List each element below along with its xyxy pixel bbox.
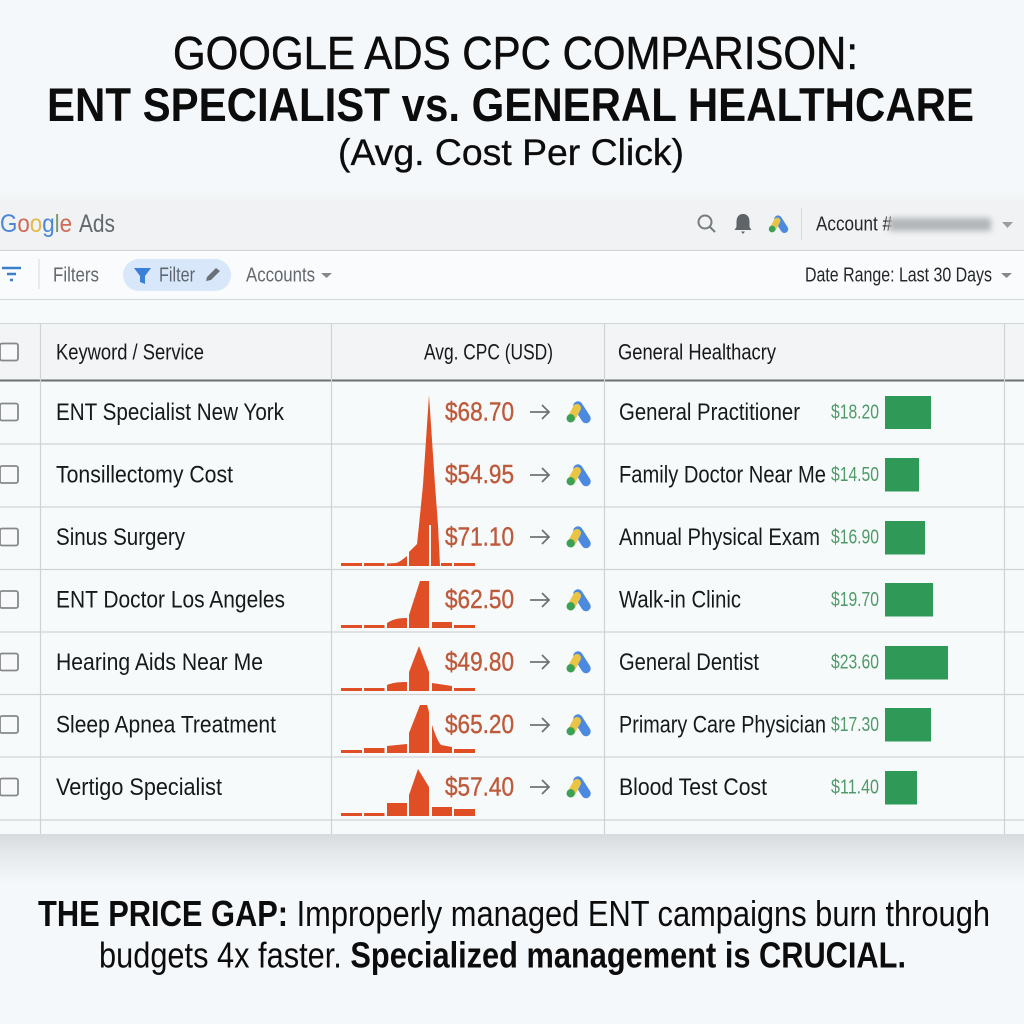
green CPC values: $18.20 xyxy=(831,402,879,424)
title xyxy=(47,27,974,173)
table header xyxy=(0,323,1024,382)
icon: google ads logo xyxy=(769,219,784,232)
general healthcare column: Annual Physical Exam xyxy=(619,524,820,551)
filter chip: Filter xyxy=(159,264,195,286)
title: (Avg. Cost Per Click) xyxy=(338,132,684,173)
logo: google ads xyxy=(0,210,115,238)
orange CPC values: $65.20 xyxy=(445,709,514,739)
footer callout xyxy=(38,893,990,976)
account number xyxy=(816,214,1013,236)
filter bar xyxy=(0,251,1024,300)
arrows xyxy=(530,405,549,794)
table header: General Healthacry xyxy=(618,340,776,364)
histogram row 7 xyxy=(341,769,475,816)
green CPC values: $14.50 xyxy=(831,464,879,486)
orange CPC values: $62.50 xyxy=(445,584,514,614)
orange CPC values: $54.95 xyxy=(445,459,514,489)
logo: google ads: Ads xyxy=(79,210,115,238)
orange CPC values xyxy=(445,396,514,802)
table grid xyxy=(0,323,1024,834)
keyword column: ENT services: Hearing Aids Near Me xyxy=(56,649,263,676)
account number: Account # xyxy=(816,214,893,236)
green CPC values xyxy=(831,402,879,798)
top bar xyxy=(0,205,1024,250)
accounts dropdown: Accounts xyxy=(246,264,315,286)
green CPC values: $23.60 xyxy=(831,652,879,674)
keyword column: ENT services: Vertigo Specialist xyxy=(56,774,222,801)
icon: bell xyxy=(734,214,752,234)
keyword column: ENT services: Sleep Apnea Treatment xyxy=(56,712,276,738)
keyword column: ENT services: ENT Doctor Los Angeles xyxy=(56,586,285,614)
green bars xyxy=(885,396,948,804)
icon: search xyxy=(698,216,715,232)
green CPC values: $17.30 xyxy=(831,714,879,736)
general healthcare column: General Dentist xyxy=(619,649,759,676)
orange CPC values: $49.80 xyxy=(445,646,514,676)
table header: Avg. CPC (USD) xyxy=(424,340,553,364)
checkboxes xyxy=(0,404,18,796)
green CPC values: $16.90 xyxy=(831,526,879,548)
histogram row 6 xyxy=(341,705,475,753)
orange CPC values: $71.10 xyxy=(445,522,514,552)
orange CPC values: $57.40 xyxy=(445,772,514,802)
logo: google ads: Google xyxy=(0,210,72,238)
keyword column: ENT services: Sinus Surgery xyxy=(56,524,186,551)
filter chip xyxy=(123,259,231,291)
histogram row 5 xyxy=(341,646,475,691)
chart: orange CPC histograms xyxy=(341,395,475,816)
histogram row 4 xyxy=(341,581,475,628)
general healthcare column: Primary Care Physician xyxy=(619,712,826,738)
orange CPC values: $68.70 xyxy=(445,396,514,426)
general healthcare column xyxy=(619,399,826,801)
general healthcare column: Walk-in Clinic xyxy=(619,586,741,614)
footer callout: budgets 4x faster. Specialized management is CRUCIAL. xyxy=(99,934,906,976)
general healthcare column: General Practitioner xyxy=(619,399,800,426)
table header: Keyword / Service xyxy=(56,340,204,364)
panel: google ads table xyxy=(0,190,1024,884)
title: GOOGLE ADS CPC COMPARISON: xyxy=(173,27,858,79)
icons: google ads row logos xyxy=(566,406,586,798)
general healthcare column: Blood Test Cost xyxy=(619,774,767,801)
general healthcare column: Family Doctor Near Me xyxy=(619,462,826,488)
keyword column: ENT services xyxy=(56,399,285,801)
green CPC values: $19.70 xyxy=(831,589,879,611)
green CPC values: $11.40 xyxy=(831,776,879,798)
filters label: Filters xyxy=(53,264,99,286)
keyword column: ENT services: Tonsillectomy Cost xyxy=(56,462,233,488)
spike spanning rows 1-3 xyxy=(341,395,475,566)
keyword column: ENT services: ENT Specialist New York xyxy=(56,399,285,426)
icon: filter lines xyxy=(2,268,21,280)
